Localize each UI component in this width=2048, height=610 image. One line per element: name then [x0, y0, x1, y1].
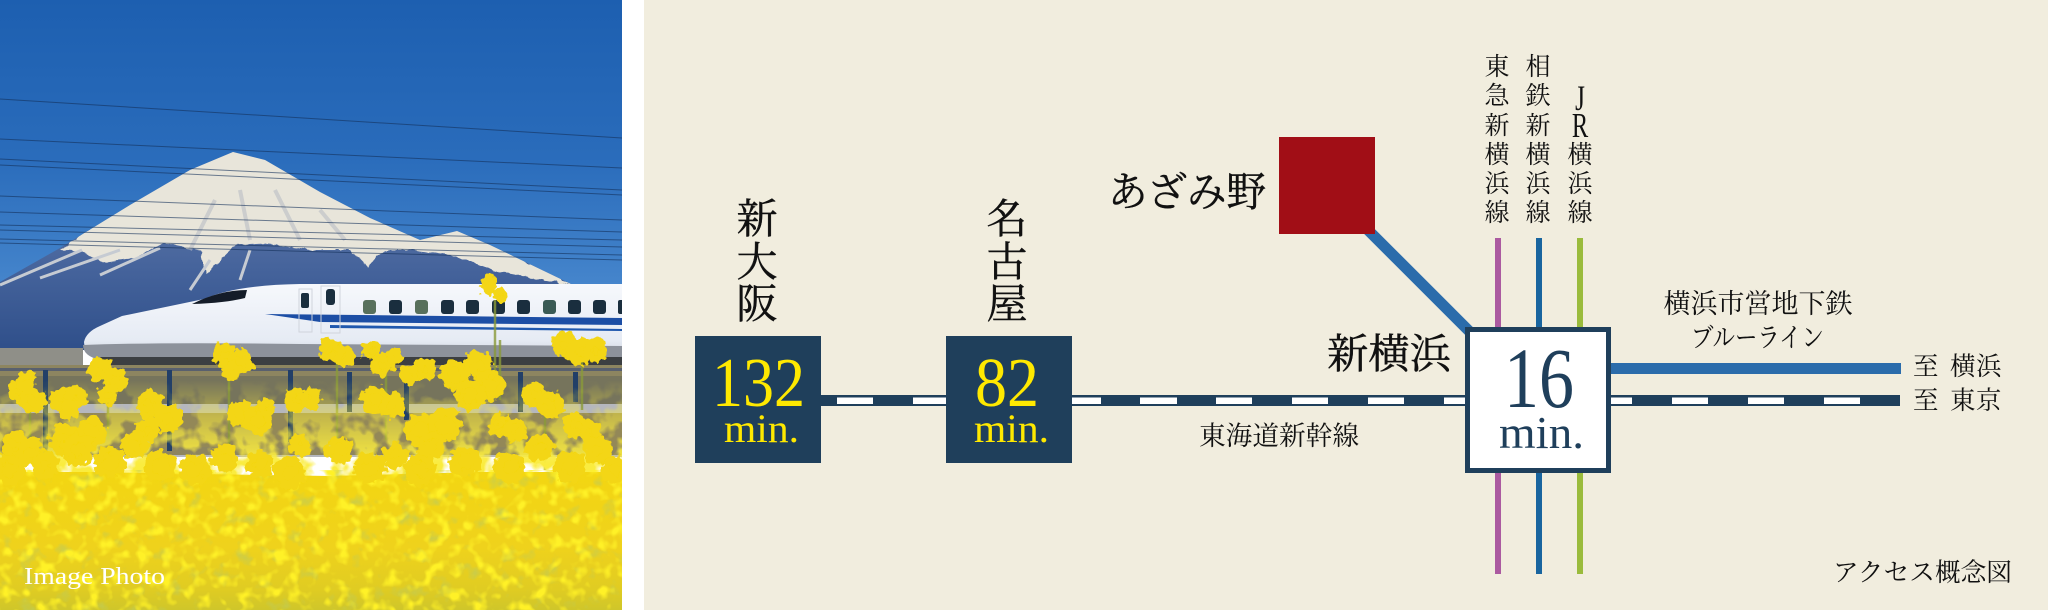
panel: photo of Shinkansen, Mt. Fuji and rapeseed flowers — [0, 0, 625, 610]
line: JR Yokohama — [1577, 238, 1583, 574]
overhead wires — [0, 99, 622, 260]
station name: あざみ野 — [1108, 169, 1266, 215]
label: JR Yokohama Line: J — [1575, 78, 1585, 118]
Shinkansen train — [83, 284, 624, 365]
label: JR Yokohama Line: 横 — [1567, 141, 1593, 169]
sky — [0, 0, 622, 284]
label: Yokohama Municipal Subway Blue Line — [1664, 289, 1852, 353]
label: to Yokohama: 至 — [1913, 352, 1939, 381]
panel: access diagram background — [644, 0, 2048, 610]
label: Yokohama Municipal Subway Blue Line: ブルーライン — [1691, 323, 1824, 353]
label: JR Yokohama Line: R — [1572, 106, 1589, 145]
red square marker — [1279, 137, 1375, 234]
station name: 阪 — [736, 281, 778, 327]
label: Sotetsu Shin-Yokohama Line: 新 — [1525, 112, 1551, 140]
station name: 名 — [986, 196, 1028, 242]
line: Tokyu Shin-Yokohama — [1495, 238, 1501, 574]
time box 82 min. — [946, 336, 1072, 463]
label: Yokohama Municipal Subway Blue Line: 横浜市営地下鉄 — [1664, 289, 1852, 319]
label: Tokyu Shin-Yokohama Line: 東 — [1484, 53, 1510, 81]
flower stems — [30, 300, 582, 470]
time box: 16 min. — [1468, 330, 1608, 470]
label: Sotetsu Shin-Yokohama Line: 浜 — [1525, 170, 1551, 198]
label: Tokyu Shin-Yokohama Line: 線 — [1484, 199, 1510, 227]
station name: 屋 — [986, 281, 1028, 327]
label: Sotetsu Shin-Yokohama Line: 線 — [1525, 199, 1551, 227]
label: JR Yokohama Line — [1567, 78, 1593, 227]
label: to Tokyo: 至 — [1913, 386, 1939, 415]
time box 132 min.: 132 — [712, 345, 805, 422]
time box: 16 min.: min. — [1499, 407, 1584, 458]
line: Tokaido Shinkansen — [800, 395, 1900, 406]
label: to Yokohama: 横浜 — [1950, 352, 2002, 381]
label: JR Yokohama Line: 浜 — [1567, 170, 1593, 198]
label: Sotetsu Shin-Yokohama Line: 横 — [1525, 141, 1551, 169]
flower clusters — [0, 280, 625, 484]
label: to Tokyo: 東京 — [1950, 386, 2002, 415]
line: Azamino to Shin-Yokohama — [1366, 228, 1474, 336]
label: JR Yokohama Line: 線 — [1567, 199, 1593, 227]
time box 132 min. — [695, 336, 821, 463]
station: Nagoya — [946, 196, 1072, 463]
mountain — [0, 152, 571, 350]
label: Sotetsu Shin-Yokohama Line: 相 — [1525, 53, 1551, 81]
label: Tokyu Shin-Yokohama Line: 急 — [1484, 82, 1510, 110]
label: Tokaido Shinkansen: 東海道新幹線 — [1199, 421, 1359, 451]
station name: 大 — [736, 239, 778, 285]
time box 82 min.: 82 — [975, 345, 1039, 422]
caption: access concept diagram: アクセス概念図 — [1833, 558, 2012, 587]
time box: 16 min.: 16 — [1504, 330, 1574, 426]
time box 132 min.: min. — [724, 406, 799, 451]
station name: 新 — [736, 196, 778, 242]
time box 82 min.: min. — [974, 406, 1049, 451]
label: Tokyu Shin-Yokohama Line: 新 — [1484, 112, 1510, 140]
label: Tokyu Shin-Yokohama Line: 横 — [1484, 141, 1510, 169]
rapeseed flower field — [0, 380, 622, 610]
line: Sotetsu Shin-Yokohama — [1536, 238, 1542, 574]
station: Shin-Osaka — [695, 196, 821, 463]
trackside ground and fence — [0, 348, 622, 457]
caption: Image Photo: Image Photo — [24, 564, 165, 590]
label: Shin-Yokohama: 新横浜 — [1327, 331, 1452, 377]
station: Azamino — [1108, 137, 1375, 234]
label: Sotetsu Shin-Yokohama Line: 鉄 — [1525, 82, 1551, 110]
station name: 古 — [986, 239, 1028, 285]
label: Tokyu Shin-Yokohama Line: 浜 — [1484, 170, 1510, 198]
line: Blue Line — [1611, 363, 1901, 374]
